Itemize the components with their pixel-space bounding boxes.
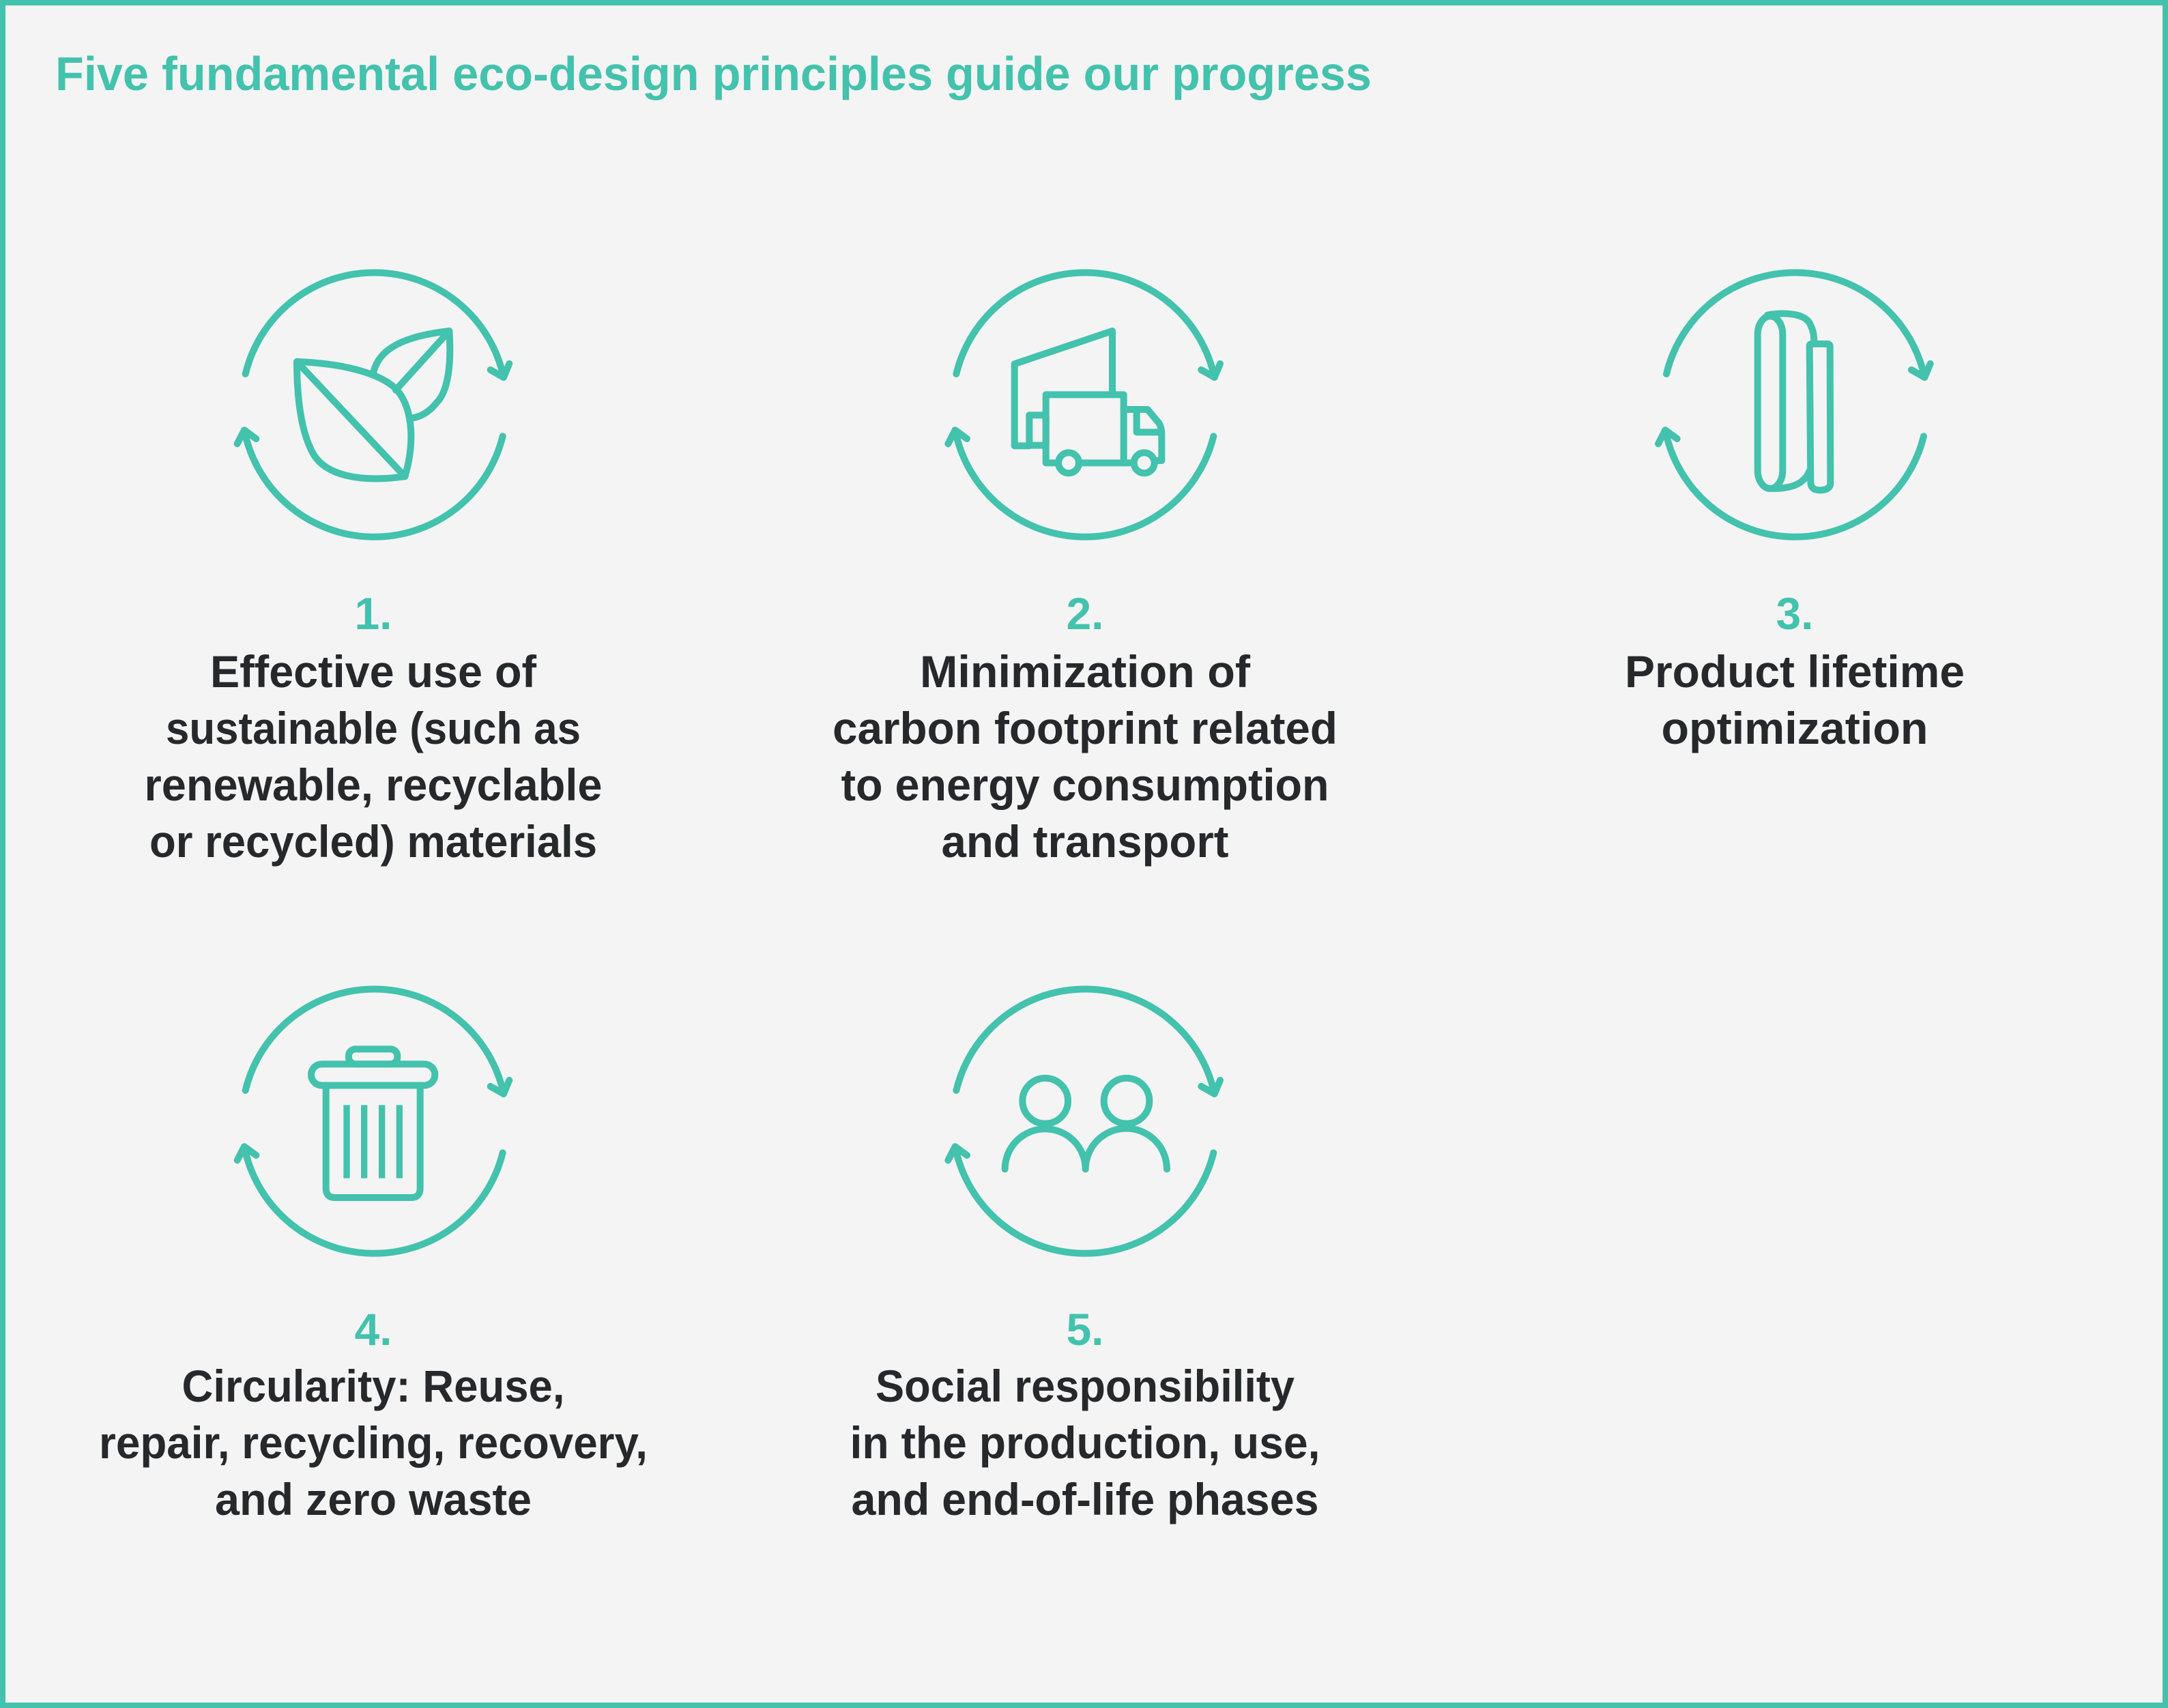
text block 1	[145, 588, 602, 867]
text block 5: in the production, use,	[850, 1417, 1320, 1468]
text block 3: optimization	[1661, 703, 1928, 753]
title: Five fundamental eco-design principles guide our progress	[55, 47, 1372, 100]
text block 3: Product lifetime	[1625, 646, 1965, 697]
text block 1: or recycled) materials	[149, 816, 597, 867]
text block 4: and zero waste	[215, 1474, 532, 1524]
text block 2: Minimization of	[920, 646, 1251, 697]
text block 3	[1625, 588, 1965, 753]
text block 1: renewable, recyclable	[145, 759, 602, 810]
text block 1: sustainable (such as	[166, 703, 581, 753]
text block 1: 1.	[354, 588, 392, 639]
text block 2: and transport	[942, 816, 1229, 867]
text block 5	[850, 1304, 1320, 1524]
text block 5: Social responsibility	[876, 1361, 1295, 1411]
text block 5: and end-of-life phases	[852, 1474, 1318, 1524]
text block 4	[99, 1304, 648, 1524]
icon: leaf cycle	[237, 272, 509, 537]
icon: trash cycle	[237, 989, 509, 1254]
text block 5: 5.	[1066, 1304, 1104, 1355]
icon: pillow cycle	[1658, 272, 1931, 537]
text block 2: 2.	[1066, 588, 1104, 639]
text block 3: 3.	[1776, 588, 1814, 639]
text block 2	[833, 588, 1338, 867]
text block 2: carbon footprint related	[833, 703, 1338, 753]
text block 4: repair, recycling, recovery,	[99, 1417, 648, 1468]
text block 4: 4.	[354, 1304, 392, 1355]
text block 4: Circularity: Reuse,	[182, 1361, 565, 1411]
text block 2: to energy consumption	[841, 759, 1329, 810]
icon: people cycle	[948, 989, 1220, 1254]
icon: truck cycle	[948, 272, 1220, 537]
text block 1: Effective use of	[210, 646, 537, 697]
